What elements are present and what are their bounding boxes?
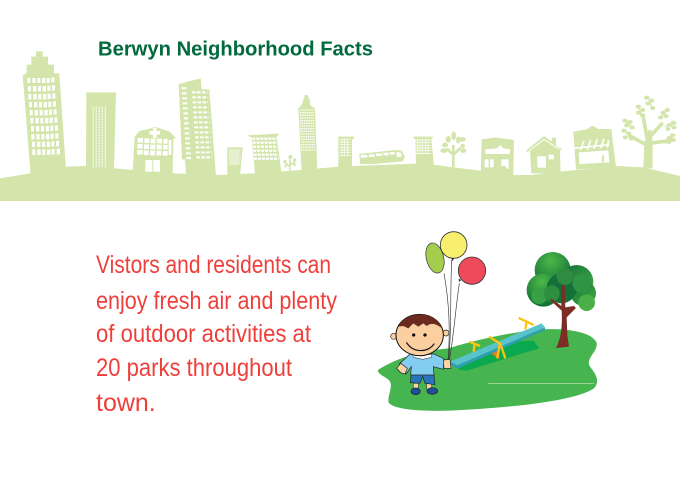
collar [413,354,432,359]
hospital [133,127,176,175]
title: Berwyn Neighborhood Facts [98,38,373,60]
lawn [378,329,597,411]
boy [391,314,451,395]
large tree [621,96,677,168]
bus [359,150,405,164]
text block: parks fact: town. [96,389,156,417]
lawn highlight [488,382,594,384]
smile [407,343,434,351]
hand right [443,359,451,368]
shorts [410,368,435,385]
tower one [23,51,66,175]
balloon strings [444,260,459,360]
balloon: green [423,241,447,275]
ground right [338,163,680,201]
ears [391,333,397,339]
face [396,314,443,356]
balloon: yellow [440,232,467,261]
hand left [397,363,407,374]
right building [413,137,434,166]
skyline: left part [0,51,343,201]
shop one [481,137,514,175]
shop two [573,126,616,169]
text block: parks fact: enjoy fresh air and plenty [96,287,337,315]
tree [527,252,596,348]
seesaw [450,318,545,369]
tower three [179,78,216,176]
text block: parks fact: of outdoor activities at [96,320,311,348]
small building [227,147,243,177]
legs and shoes [413,383,432,389]
text block: parks fact: 20 parks throughout [96,354,292,382]
shirt [399,354,444,375]
tower four [298,95,317,172]
small tree [283,155,296,172]
skyline: right part [338,96,680,201]
illustration: boy in park [378,232,597,411]
hair [398,314,442,328]
mid building [247,134,282,173]
tower two [86,92,116,170]
left building [338,137,355,167]
house [526,136,562,173]
eyes [412,333,415,337]
text block: parks fact [96,251,337,417]
seesaw shadow [453,341,539,371]
ground left [0,166,343,201]
park tree [440,131,466,167]
balloon: red [458,257,486,284]
text block: parks fact: Vistors and residents can [96,251,331,279]
